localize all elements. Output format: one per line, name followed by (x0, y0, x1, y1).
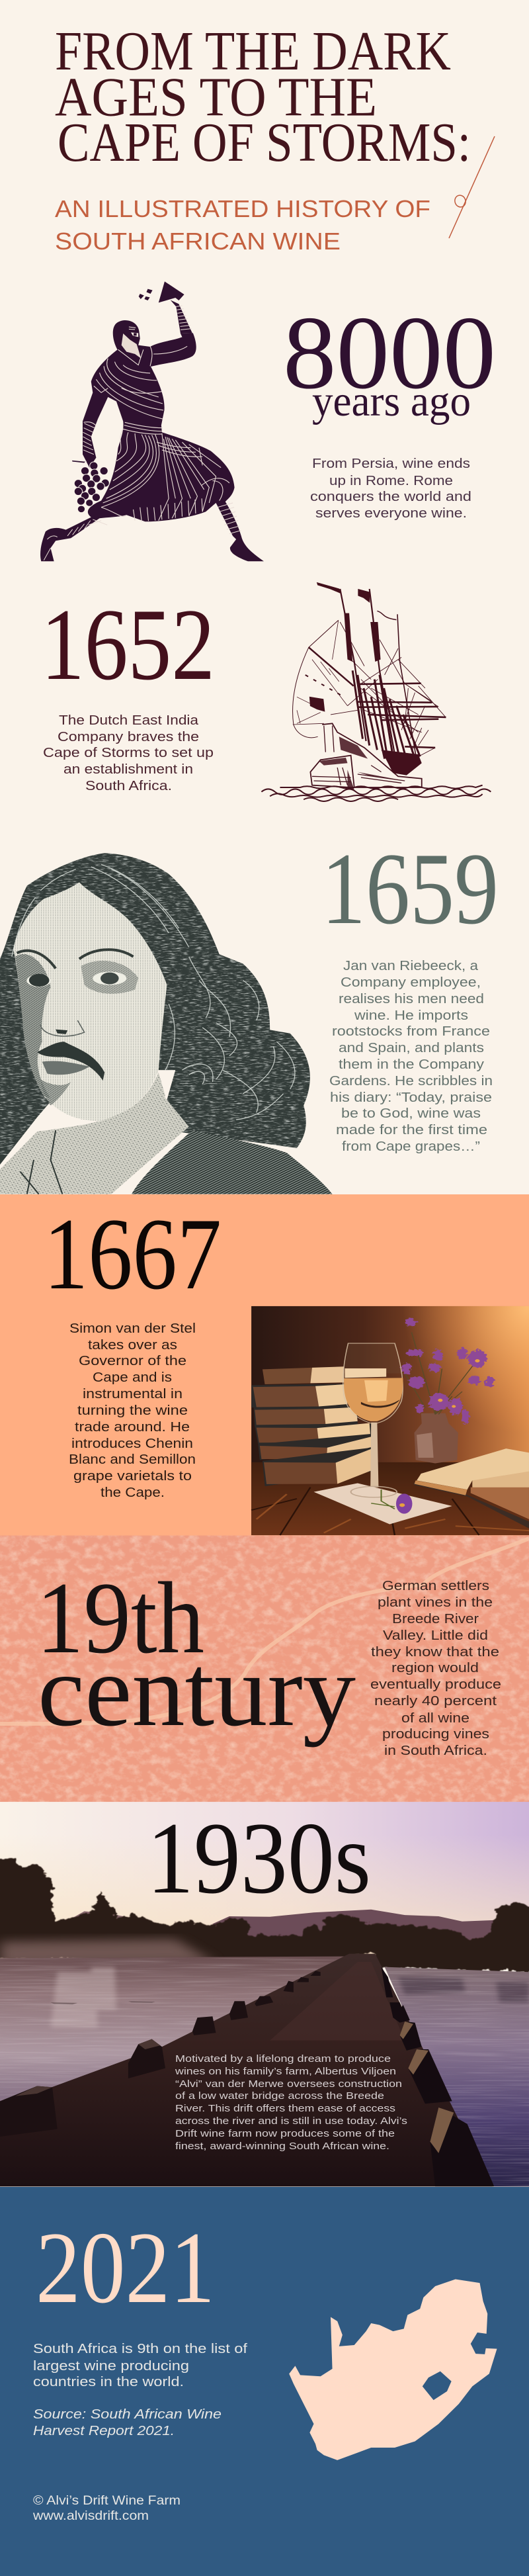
text: 1659 body: wine. He imports (354, 1008, 468, 1023)
heading: 19th century: 19th (36, 1561, 204, 1675)
text: 8000 years ago body (310, 457, 471, 521)
eye sockets (81, 961, 138, 994)
yards (358, 684, 446, 748)
text: 8000 years ago body: up in Rome. Rome (329, 474, 453, 488)
text: 1667 body (69, 1321, 196, 1500)
illustration: engraved portrait of Jan van Riebeeck (0, 848, 333, 1194)
text: 1930s body: River. This drift offers them ease of access (175, 2103, 395, 2114)
title (55, 21, 471, 173)
text: 1930s body: Drift wine farm now produces some of the (175, 2128, 395, 2139)
text: 19th century body: region would (391, 1661, 479, 1675)
text: 19th century body: Breede River (392, 1612, 479, 1626)
text: 19th century body: German settlers (382, 1579, 489, 1593)
text: 19th century body: nearly 40 percent (374, 1694, 497, 1709)
open book (413, 1483, 529, 1529)
eyes (26, 975, 51, 987)
text: 1667 body: the Cape. (101, 1486, 165, 1500)
hair (0, 853, 310, 1165)
text: 1659 body: from Cape grapes…” (342, 1139, 480, 1154)
text: 1667 body: takes over as (88, 1338, 177, 1353)
map: South Africa (289, 2279, 497, 2460)
text: 2021 body: largest wine producing (33, 2359, 189, 2374)
text: 8000 years ago body: conquers the world and (310, 490, 471, 504)
subtitle: AN ILLUSTRATED HISTORY OF (55, 195, 430, 222)
text: 19th century body: of all wine (401, 1711, 469, 1726)
text: 1667 body: trade around. He (75, 1420, 190, 1435)
flags (317, 583, 340, 593)
stacked books (251, 1366, 373, 1486)
text: 1652 body (43, 713, 214, 793)
text: copyright (32, 2494, 181, 2523)
photo: low water bridge at dusk (0, 1802, 529, 2188)
text: 1652 body: Company braves the (58, 730, 199, 744)
text: 1652 body: South Africa. (85, 779, 172, 793)
river vein (0, 1538, 529, 1724)
text: 19th century body (370, 1579, 501, 1758)
heading: 8000 years ago: 8000 (283, 295, 496, 411)
collar (0, 1094, 189, 1194)
vase (415, 1413, 458, 1464)
text: 1659 body: rootstocks from France (332, 1024, 490, 1039)
text: 2021 body (33, 2342, 248, 2438)
text: 1659 body: be to God, wine was (341, 1106, 481, 1121)
table (251, 1462, 529, 1535)
cloth and muscle lines (84, 346, 229, 521)
dark rigging mass (344, 613, 381, 662)
text: 1667 body: Simon van der Stel (69, 1321, 196, 1336)
heading: 19th century (36, 1561, 356, 1748)
water left (0, 1957, 349, 2106)
text: copyright: © Alvi’s Drift Wine Farm (33, 2494, 181, 2508)
text: 1930s body: “Alvi” van der Merwe oversees construction (175, 2078, 402, 2090)
text: 1659 body: realises his men need (339, 992, 484, 1006)
text: 1652 body: an establishment in (63, 762, 193, 777)
mountains (212, 1910, 496, 1947)
text: 1659 body: Gardens. He scribbles in (329, 1074, 493, 1088)
text: 1652 body: Cape of Storms to set up (43, 746, 214, 760)
cup (159, 281, 184, 302)
heading: 1652: 1652 (41, 588, 215, 701)
text: 1930s body: wines on his family’s farm, Albertus Viljoen (175, 2066, 396, 2077)
text: 1659 body: Jan van Riebeeck, a (343, 959, 479, 973)
hair texture (0, 848, 324, 1155)
text: 19th century body: they know that the (371, 1645, 499, 1660)
subtitle (55, 195, 430, 255)
heading: 8000 years ago: years ago (312, 377, 471, 425)
heading: 2021: 2021 (36, 2211, 215, 2325)
text: 1659 body: his diary: “Today, praise (330, 1090, 492, 1105)
heading: 1667: 1667 (44, 1197, 222, 1311)
moustache and mouth (37, 1042, 104, 1081)
water ripples (0, 1957, 529, 2188)
text: 1659 body: made for the first time (336, 1123, 487, 1137)
text: 1659 body: Company employee, (341, 975, 481, 990)
grape bunch (71, 460, 109, 513)
heading: 1659: 1659 (321, 832, 499, 946)
text: 1930s body: finest, award-winning South African wine. (175, 2141, 389, 2152)
panel: 2021 blue (0, 2187, 529, 2576)
coat (132, 1130, 333, 1194)
text: 1667 body: turning the wine (77, 1403, 188, 1418)
masts (340, 589, 366, 741)
text: 1930s body: across the river and is still in use today. Alvi’s (175, 2115, 407, 2127)
right bollards (382, 1967, 494, 2186)
sail (293, 620, 339, 738)
beard and eye (122, 333, 141, 359)
panel: 19th century marble (0, 1535, 529, 1802)
rigging lines (331, 622, 445, 756)
limb hatching (44, 306, 241, 560)
text: 1667 body: Cape and is (93, 1370, 172, 1385)
heading: 19th century: century (38, 1634, 356, 1748)
illustration: sailing ship (261, 583, 491, 801)
icon: wine glass line (449, 136, 495, 238)
subtitle: SOUTH AFRICAN WINE (55, 228, 341, 255)
wrist and forearm (171, 300, 192, 333)
panel: cream background (0, 0, 529, 1194)
text: 1652 body: The Dutch East India (59, 713, 199, 728)
text: 19th century body: Valley. Little did (383, 1628, 488, 1643)
text: 1659 body: them in the Company (339, 1057, 484, 1072)
face shadow hatch (15, 954, 51, 1098)
water right (385, 1967, 529, 2186)
text: 2021 body: Source: South African Wine (33, 2407, 222, 2422)
eyebrows (17, 951, 56, 969)
text: 19th century body: plant vines in the (378, 1595, 493, 1610)
title: CAPE OF STORMS: (58, 112, 471, 173)
waves (261, 785, 491, 801)
text: 19th century body: in South Africa. (384, 1744, 487, 1758)
wine glass (344, 1343, 401, 1374)
road (0, 1954, 493, 2186)
text: 1930s body: of a low water bridge across the Breede (175, 2090, 384, 2102)
text: copyright: www.alvisdrift.com (32, 2509, 149, 2523)
tree line (0, 1858, 529, 1972)
nose (40, 1020, 85, 1036)
hull (310, 723, 422, 787)
illustration: Roman figure with wine cup and grapes (40, 281, 264, 561)
text: 1659 body: and Spain, and plants (339, 1041, 484, 1055)
body silhouette (40, 320, 264, 561)
text: 1930s body (175, 2053, 407, 2152)
text: 8000 years ago body: serves everyone wine. (315, 506, 467, 521)
text: 1667 body: Blanc and Semillon (69, 1452, 196, 1467)
text: 1667 body: grape varietals to (73, 1469, 192, 1484)
heading: 1930s: 1930s (147, 1801, 371, 1915)
text: 1930s body: Motivated by a lifelong dream to produce (175, 2053, 391, 2065)
text: 2021 body: Harvest Report 2021. (33, 2424, 175, 2438)
left bollards (0, 1971, 321, 2137)
text: 2021 body: South Africa is 9th on the list of (33, 2342, 248, 2356)
text: 8000 years ago body: From Persia, wine ends (312, 457, 470, 471)
flowers (405, 1333, 475, 1415)
text: 1667 body: Governor of the (79, 1354, 186, 1368)
text: 1659 body (329, 959, 493, 1154)
hair highlights (12, 864, 295, 1120)
panel: 1667 peach (0, 1194, 529, 1535)
text: 19th century body: eventually produce (370, 1677, 501, 1692)
text: 19th century body: producing vines (382, 1727, 489, 1742)
neck (64, 1073, 165, 1141)
text: 1667 body: instrumental in (83, 1387, 183, 1401)
text: 1667 body: introduces Chenin (71, 1437, 193, 1451)
title: AGES TO THE (55, 66, 377, 128)
text: 2021 body: countries in the world. (33, 2375, 184, 2389)
sky (0, 1802, 529, 1964)
face (13, 882, 167, 1121)
letter and flower (313, 1484, 452, 1525)
title: FROM THE DARK (55, 21, 451, 82)
photo: books, wine glass and flowers (251, 1306, 529, 1535)
